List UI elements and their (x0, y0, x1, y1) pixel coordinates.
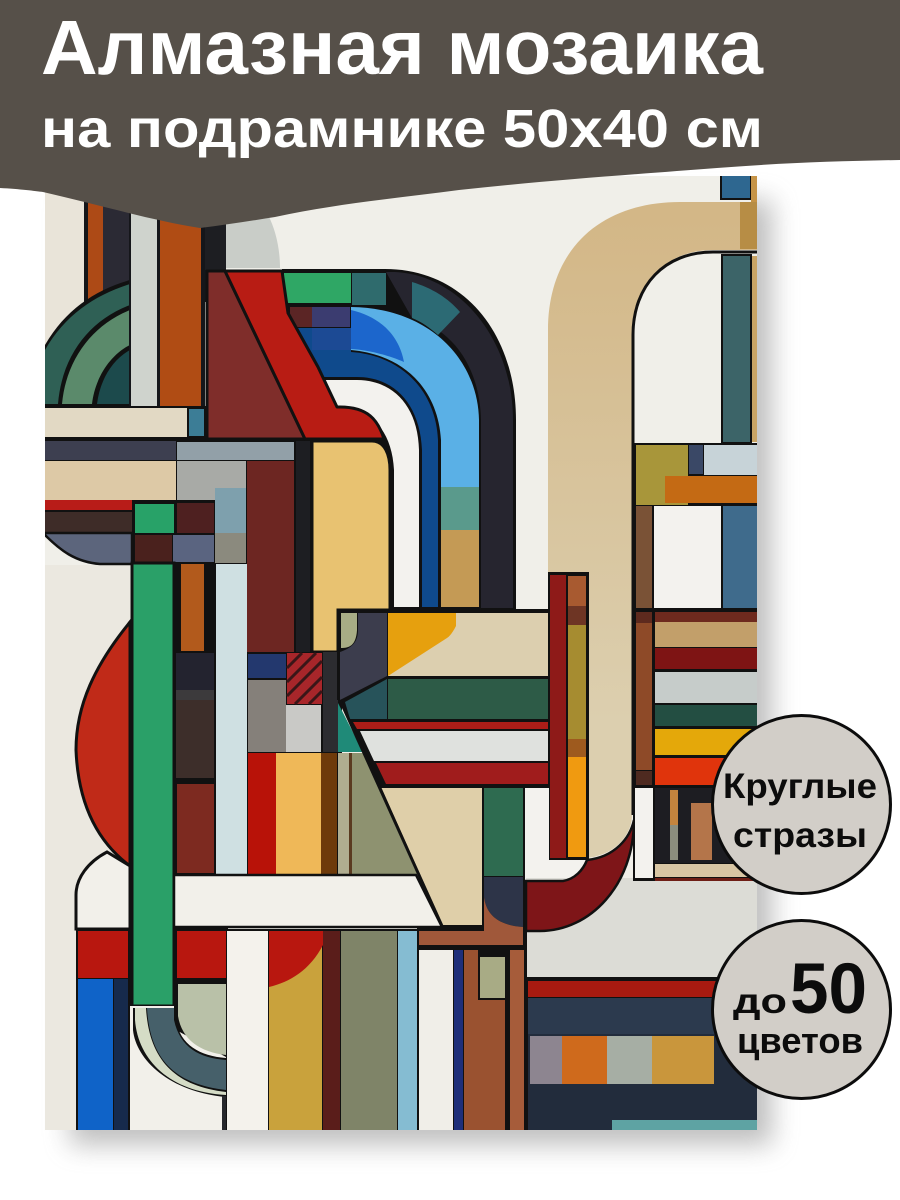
white arch corner (76, 852, 130, 929)
bottom right stripes (526, 977, 757, 1130)
central panels (337, 609, 549, 788)
grey and rust columns (129, 213, 205, 406)
subtitle: на подрамнике 50х40 см (41, 99, 763, 159)
mid-left backing (45, 406, 313, 653)
right side panels (633, 254, 757, 881)
badge: round rhinestones: стразы (733, 816, 867, 855)
blue arch group (282, 269, 516, 611)
left bar stack (45, 408, 310, 653)
badge: up to 50 colours (712, 920, 890, 1098)
painting (45, 170, 757, 1130)
badge: up to 50 colours: до (733, 982, 787, 1021)
badge: round rhinestones: Круглые (723, 767, 877, 806)
top-left stripes (84, 202, 280, 302)
lower right grey panel (526, 878, 757, 977)
canvas shadow (70, 200, 772, 1145)
green and navy blocks (482, 786, 525, 931)
title: Алмазная мозаика (41, 5, 764, 91)
green arches (45, 280, 130, 408)
striped column (548, 572, 589, 860)
red and maroon trapezoid (207, 271, 384, 439)
brown block (417, 897, 527, 1130)
white centre notch (548, 788, 549, 860)
central columns (172, 563, 418, 876)
badge: up to 50 colours: цветов (737, 1020, 863, 1061)
grey bowl (45, 533, 132, 564)
white beam (174, 875, 442, 927)
right tube (548, 170, 757, 858)
green column (132, 563, 174, 1006)
yellow block (312, 441, 390, 652)
red bulge (76, 622, 130, 866)
header banner (0, 0, 900, 228)
diagonal line (340, 700, 442, 926)
bottom-left blocks (76, 928, 228, 1130)
badge: up to 50 colours: 50 (790, 950, 867, 1029)
badge: round rhinestones (712, 716, 890, 894)
bottom columns (226, 929, 418, 1130)
tan triangle (380, 787, 483, 926)
red swoosh (526, 820, 634, 931)
